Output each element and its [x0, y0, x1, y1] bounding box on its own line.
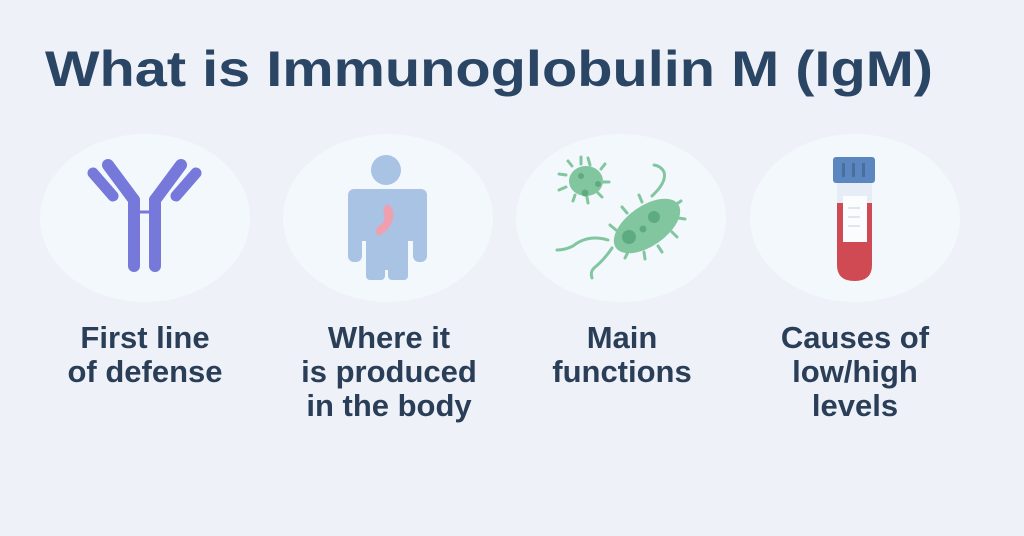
- label 2: is produced: [301, 354, 477, 389]
- label 1: First line: [80, 320, 210, 355]
- label 4: Causes of: [781, 320, 930, 355]
- label 4: low/high: [792, 354, 918, 389]
- panel: where produced: [283, 134, 493, 423]
- icon: bacteria: [557, 157, 685, 278]
- label 4: levels: [812, 388, 898, 423]
- circle background 4: [750, 134, 960, 302]
- label 2: Where it: [328, 320, 450, 355]
- title: What is Immunoglobulin M (IgM): [45, 41, 933, 97]
- icon: human body: [348, 155, 427, 280]
- label 2: in the body: [306, 388, 472, 423]
- icon: antibody: [93, 165, 196, 266]
- label 3: functions: [552, 354, 692, 389]
- circle background 1: [40, 134, 250, 302]
- label 3: Main: [587, 320, 657, 355]
- circle background 2: [283, 134, 493, 302]
- icon: blood test tube: [833, 157, 875, 281]
- panel: first line of defense: [40, 134, 250, 389]
- circle background 3: [516, 134, 726, 302]
- panel: main functions: [516, 134, 726, 389]
- panel: causes: [750, 134, 960, 423]
- label 1: of defense: [67, 354, 223, 389]
